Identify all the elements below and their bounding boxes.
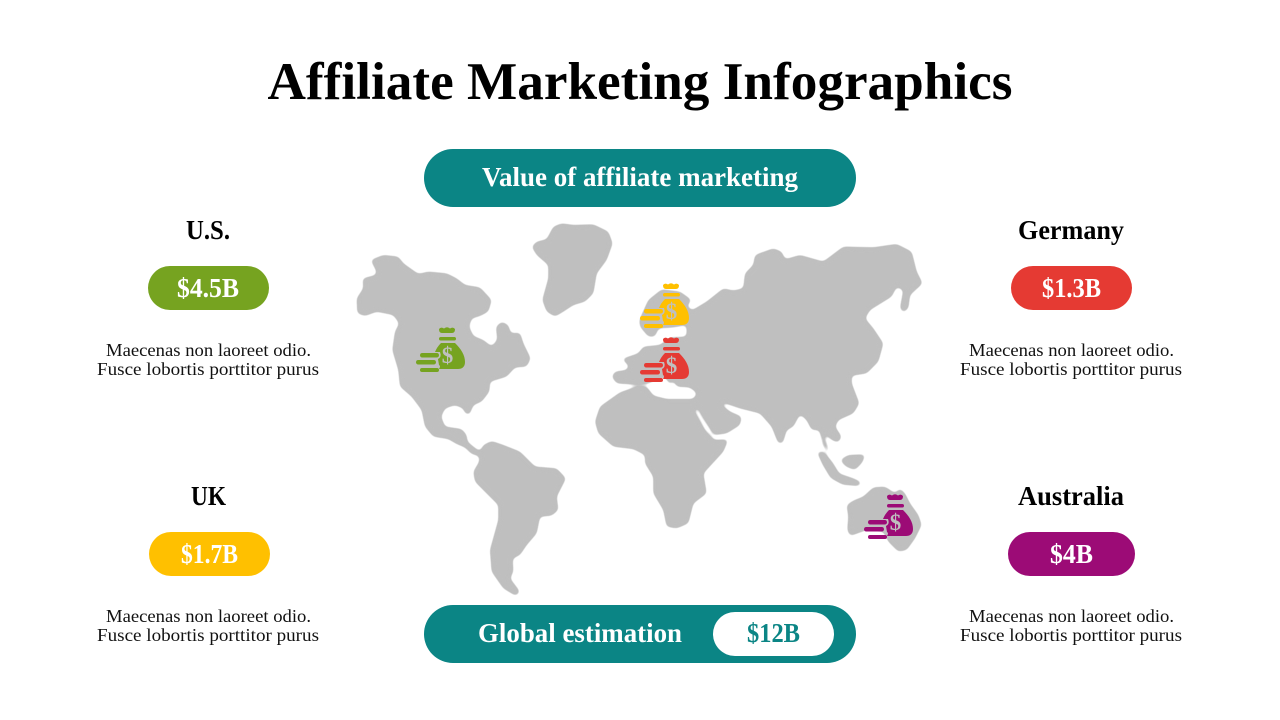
panel: Germany [960, 215, 1182, 379]
description: UK: Fusce lobortis porttitor purus [97, 625, 319, 645]
land masses [357, 223, 923, 596]
value pill: $1.7B [149, 532, 270, 576]
description: Australia: Maecenas non laoreet odio. [969, 606, 1174, 626]
value pill: $1.3B: $1.3B [1042, 273, 1101, 303]
description: Australia [960, 606, 1182, 645]
banner: global estimation [424, 605, 856, 663]
value pill: $1.3B [1011, 266, 1132, 310]
value pill: $12B: $12B [747, 618, 800, 648]
description: UK: Maecenas non laoreet odio. [106, 606, 311, 626]
heading: Australia: Australia [1018, 481, 1124, 511]
description: Germany: Maecenas non laoreet odio. [969, 340, 1174, 360]
description: U.S.: Fusce lobortis porttitor purus [97, 359, 319, 379]
banner: global estimation: Global estimation [478, 618, 682, 648]
title: Affiliate Marketing Infographics [268, 53, 1012, 111]
value pill: $4.5B [148, 266, 269, 310]
icon: money bag Australia [864, 494, 913, 539]
value pill: $4.5B: $4.5B [177, 273, 239, 303]
description: U.S. [97, 340, 319, 379]
icon: money bag Australia: $ [890, 510, 901, 535]
heading: UK: UK [191, 481, 226, 511]
heading: U.S.: U.S. [186, 215, 230, 245]
value pill: $4B: $4B [1050, 539, 1093, 569]
description: UK [97, 606, 319, 645]
value pill: $1.7B: $1.7B [181, 539, 238, 569]
panel: U.S. [97, 215, 319, 379]
panel: Australia [960, 481, 1182, 645]
value pill: $12B [713, 612, 834, 656]
icon: money bag Germany [640, 337, 689, 382]
world map with money bag markers [357, 223, 923, 596]
icon: money bag UK [640, 283, 689, 328]
icon: money bag Germany: $ [666, 353, 677, 378]
icon: money bag U.S. [416, 327, 465, 372]
icon: money bag UK: $ [666, 299, 677, 324]
icon: money bag U.S.: $ [442, 343, 453, 368]
banner: value of affiliate marketing: Value of affiliate marketing [482, 162, 798, 192]
panel: UK [97, 481, 319, 645]
value pill: $4B [1008, 532, 1135, 576]
heading: Germany: Germany [1018, 215, 1124, 245]
description: Germany [960, 340, 1182, 379]
banner: value of affiliate marketing [424, 149, 856, 207]
description: Germany: Fusce lobortis porttitor purus [960, 359, 1182, 379]
description: U.S.: Maecenas non laoreet odio. [106, 340, 311, 360]
description: Australia: Fusce lobortis porttitor purus [960, 625, 1182, 645]
